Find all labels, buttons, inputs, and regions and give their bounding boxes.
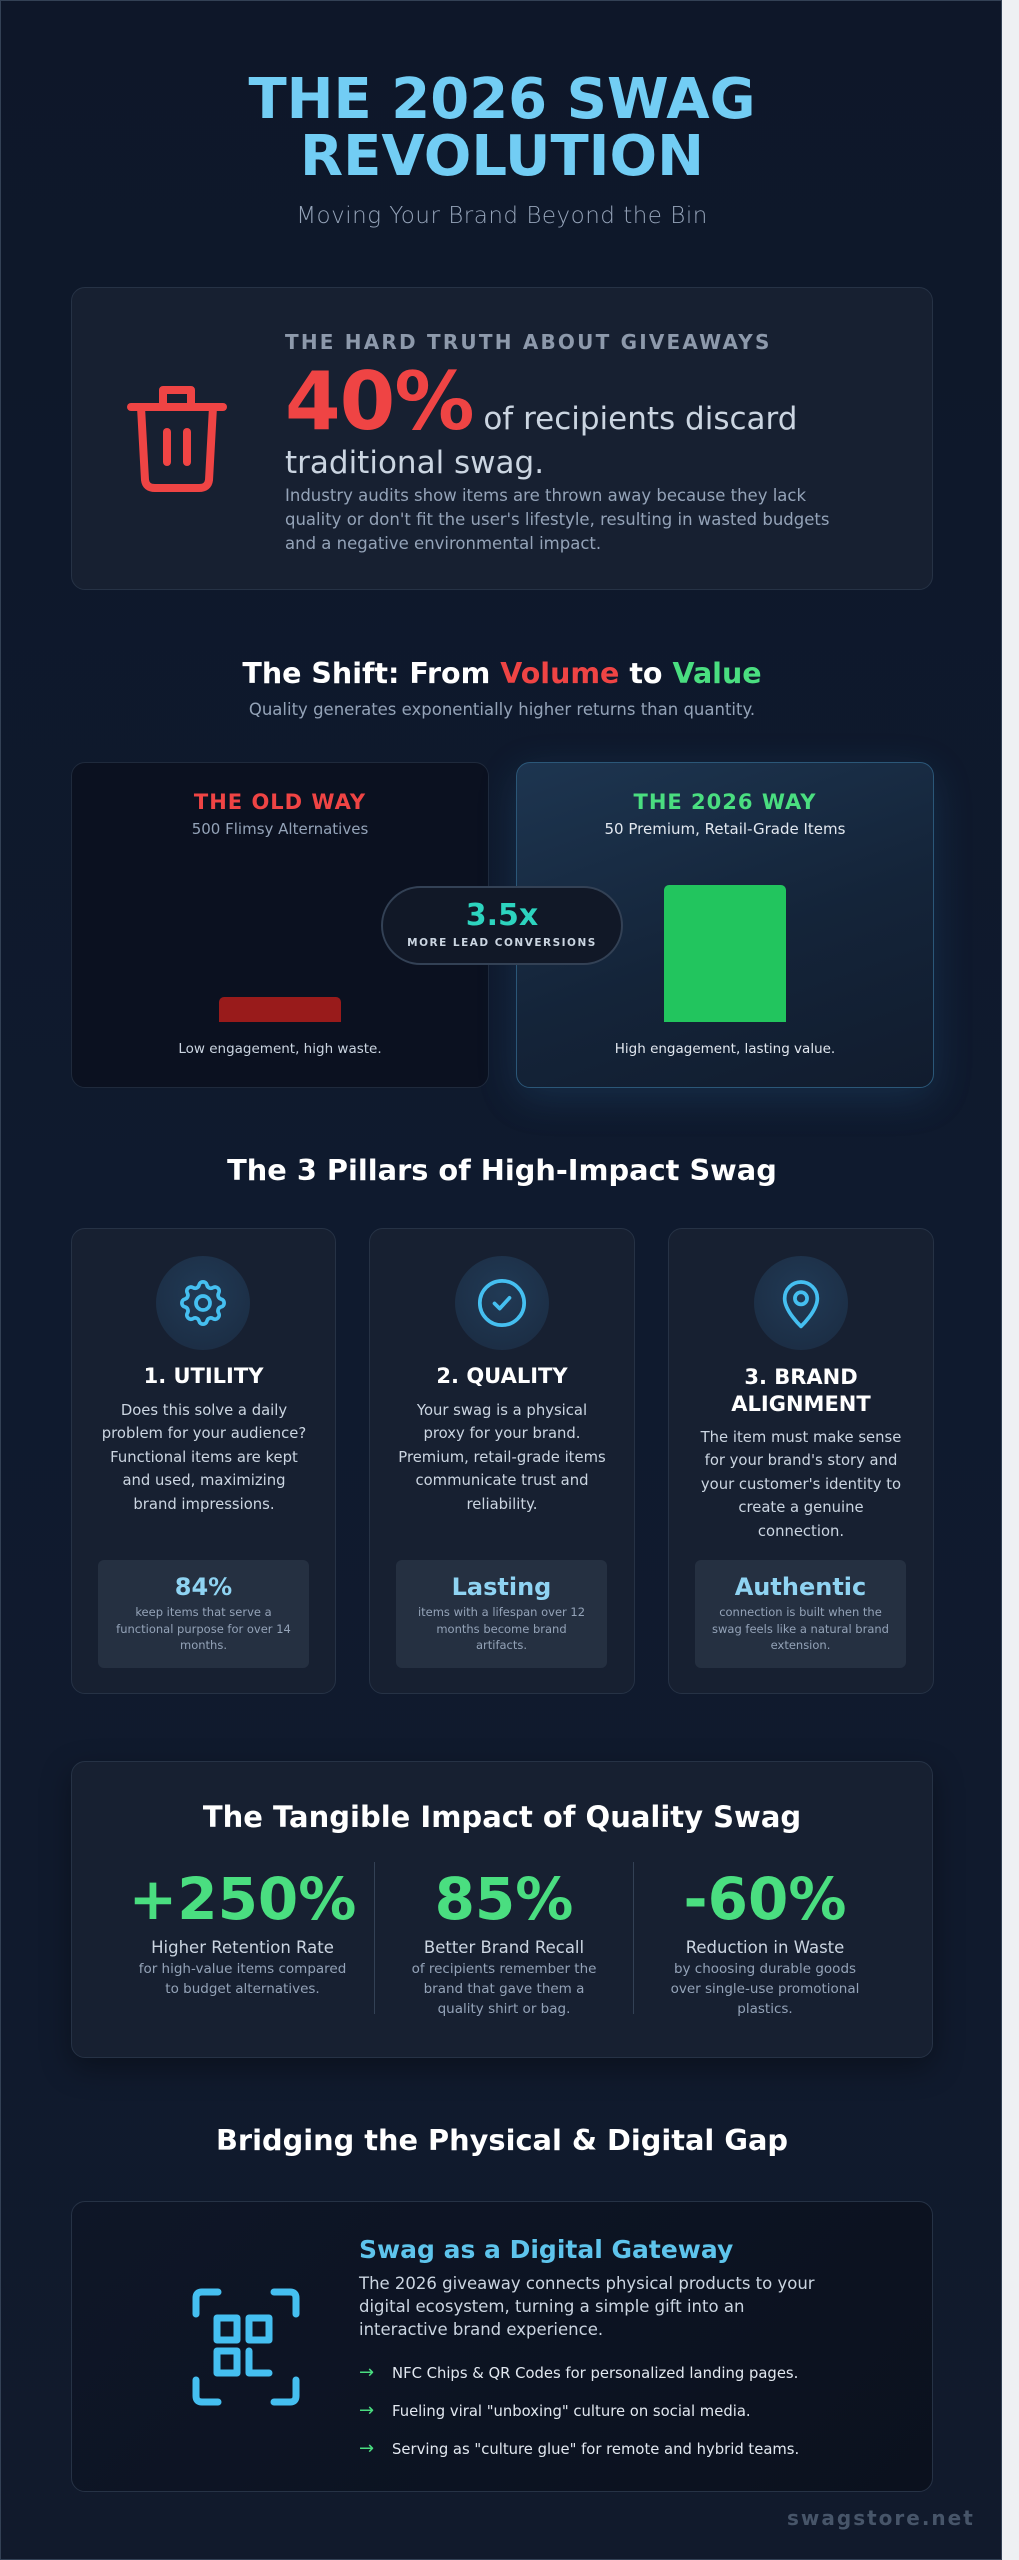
icon: qr scan [192, 2288, 300, 2406]
heading: quality: 2. QUALITY [436, 1364, 568, 1388]
stat: -60%: by choosing durable goods over single-use promotional plastics. [671, 1961, 859, 2017]
stat box: lasting: Lasting [452, 1573, 551, 1601]
stat: 85% [374, 1862, 634, 2014]
panel: digital gateway [71, 2201, 933, 2492]
stat: +250%: for high-value items compared to budget alternatives. [139, 1961, 346, 1997]
icon: trash can [127, 386, 227, 492]
panel: pillar quality [369, 1228, 635, 1694]
stat: +250% [129, 1865, 356, 1997]
stat box: lasting [396, 1560, 607, 1668]
icon: check circle [455, 1256, 549, 1350]
text: brand alignment description: The item must make sense for your brand's story and your customer's identity to create a genuine connection. [701, 1429, 901, 1540]
panel: pillar utility [71, 1228, 336, 1694]
heading: brand alignment: ALIGNMENT [731, 1392, 871, 1416]
stat: 85%: of recipients remember the brand that gave them a quality shirt or bag. [412, 1961, 596, 2017]
text: quality description: Your swag is a physical proxy for your brand. Premium, retail-grade items communicate trust and reliability. [398, 1402, 606, 1513]
stat: 85%: Better Brand Recall [424, 1938, 584, 1957]
callout: 3.5x pill: 3.5x [466, 898, 538, 933]
heading: the shift: The Shift: From Volume to Value [242, 657, 762, 690]
callout: 3.5x pill [381, 886, 623, 965]
label: old way: THE OLD WAY [194, 790, 366, 814]
panel: old way [71, 762, 489, 1088]
text: 500 flimsy: 500 Flimsy Alternatives [192, 820, 368, 838]
stat: -60% [671, 1865, 859, 2017]
heading: tangible impact: The Tangible Impact of Quality Swag [203, 1800, 801, 1834]
stat box: 84% [98, 1560, 309, 1668]
subtitle: Moving Your Brand Beyond the Bin [296, 203, 708, 229]
text: utility description: Does this solve a daily problem for your audience? Functional items are kept and used, maximizing brand impressions. [102, 1402, 306, 1513]
icon: location pin [754, 1256, 848, 1350]
stat box: 84%: 84% [175, 1573, 232, 1601]
heading: brand alignment [731, 1365, 871, 1416]
caption: high engagement: High engagement, lasting value. [615, 1041, 835, 1057]
subheading: quality generates: Quality generates exponentially higher returns than quantity. [249, 700, 755, 719]
heading: 3 pillars: The 3 Pillars of High-Impact Swag [227, 1153, 777, 1187]
title [248, 67, 756, 189]
panel: pillar brand alignment [668, 1228, 934, 1694]
callout: 3.5x pill: MORE LEAD CONVERSIONS [407, 937, 597, 949]
text: gateway description: The 2026 giveaway connects physical products to your digital ecosystem, turning a simple gift into an interactive brand experience. [359, 2274, 815, 2339]
caption: low engagement: Low engagement, high waste. [178, 1041, 382, 1057]
stat: +250%: +250% [129, 1865, 356, 1933]
list: gateway bullets: NFC Chips & QR Codes for personalized landing pages. [392, 2365, 798, 2382]
stat: 40% discard: 40% of recipients discard [285, 355, 797, 448]
list: gateway bullets: → [359, 2362, 374, 2383]
list: gateway bullets [359, 2362, 799, 2459]
list: gateway bullets: Fueling viral "unboxing" culture on social media. [392, 2403, 751, 2420]
text: 50 premium: 50 Premium, Retail-Grade Items [605, 820, 845, 838]
icon: gear [156, 1256, 250, 1350]
bar: old way [219, 997, 341, 1022]
panel: hard truth [71, 287, 933, 590]
list: gateway bullets: → [359, 2438, 374, 2459]
heading: swag as digital gateway: Swag as a Digital Gateway [359, 2235, 733, 2264]
stat: 85%: 85% [435, 1865, 573, 1933]
heading: brand alignment: 3. BRAND [744, 1365, 858, 1389]
title: REVOLUTION [300, 124, 704, 189]
panel: tangible impact [71, 1761, 933, 2058]
list: gateway bullets: → [359, 2400, 374, 2421]
label: 2026 way: THE 2026 WAY [634, 790, 816, 814]
list: gateway bullets: Serving as "culture glue" for remote and hybrid teams. [392, 2441, 799, 2458]
panel: 2026 way [516, 762, 934, 1088]
text block: industry audits: Industry audits show items are thrown away because they lack quality or don't fit the user's lifestyle, resulting in wasted budgets and a negative environmental impact. [285, 486, 829, 553]
stat: +250%: Higher Retention Rate [151, 1938, 334, 1957]
heading: bridging gap: Bridging the Physical & Digital Gap [216, 2123, 788, 2157]
stat box: authentic [695, 1560, 906, 1668]
stat box: authentic: connection is built when the swag feels like a natural brand extension. [712, 1605, 889, 1652]
bar: 2026 way [664, 885, 786, 1022]
stat box: 84%: keep items that serve a functional purpose for over 14 months. [116, 1605, 291, 1652]
title: THE 2026 SWAG [248, 67, 756, 132]
stat: -60%: -60% [684, 1865, 846, 1933]
stat box: authentic: Authentic [735, 1573, 866, 1601]
label: hard truth heading: THE HARD TRUTH ABOUT GIVEAWAYS [285, 330, 772, 354]
stat box: lasting: items with a lifespan over 12 months become brand artifacts. [418, 1605, 585, 1652]
stat: 40% discard: traditional swag. [285, 445, 544, 481]
heading: utility: 1. UTILITY [144, 1364, 263, 1388]
stat: -60%: Reduction in Waste [686, 1938, 844, 1957]
footer: brand url: swagstore.net [787, 2506, 975, 2530]
